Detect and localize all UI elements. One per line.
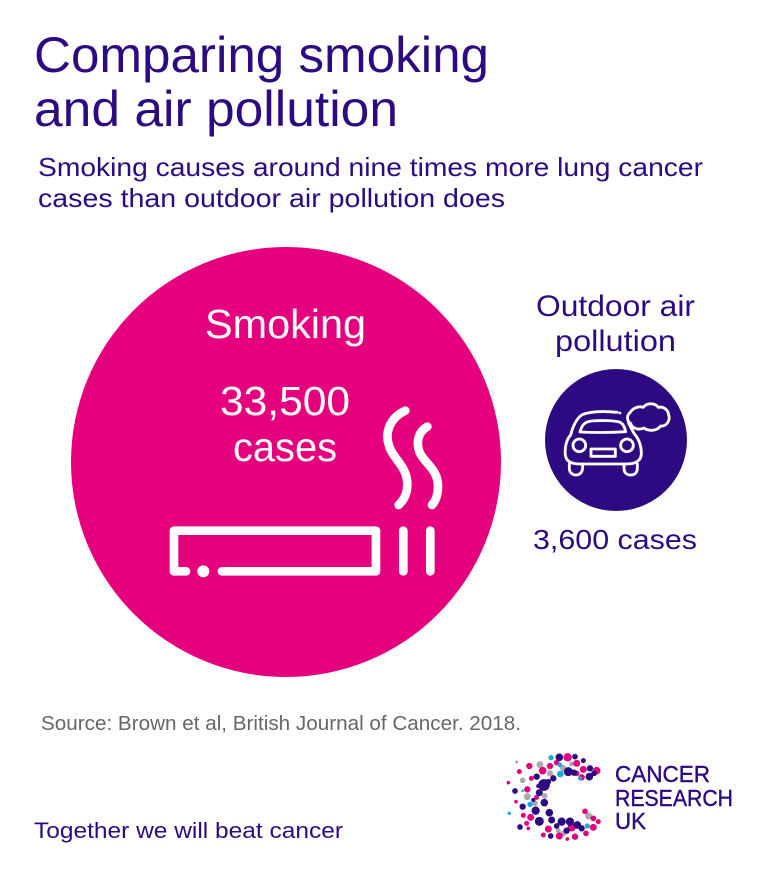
- tagline: Together we will beat cancer: [34, 818, 343, 843]
- pollution case count: 3,600 cases: [533, 524, 697, 555]
- title: Comparing smoking: [34, 27, 489, 83]
- logo wordmark: [615, 761, 733, 834]
- pollution label: Outdoor air: [536, 290, 695, 323]
- pollution label: pollution: [555, 325, 676, 358]
- pollution circle: [545, 369, 687, 511]
- subtitle: Smoking causes around nine times more lung cancer: [38, 152, 703, 182]
- logo mark: dotted C: [507, 754, 600, 840]
- logo: Cancer Research UK: [507, 754, 733, 840]
- title: and air pollution: [34, 81, 398, 137]
- logo wordmark: CANCER: [615, 761, 710, 787]
- icon: cigarette with smoke: [174, 411, 438, 577]
- panel: outdoor air pollution: [533, 290, 697, 555]
- logo wordmark: UK: [615, 808, 647, 834]
- icon: car with exhaust cloud: [565, 404, 669, 475]
- panel: smoking circle: [71, 247, 501, 677]
- smoking case count: 33,500: [220, 378, 350, 424]
- logo wordmark: RESEARCH: [615, 785, 733, 811]
- source note: Source: Brown et al, British Journal of Cancer. 2018.: [41, 713, 521, 735]
- smoking case count: cases: [233, 424, 337, 470]
- subtitle: cases than outdoor air pollution does: [38, 183, 505, 213]
- smoking case count: [220, 378, 350, 470]
- pollution label: [536, 290, 695, 358]
- smoking label: Smoking: [205, 301, 366, 347]
- subtitle: [38, 152, 703, 213]
- title: [34, 27, 489, 137]
